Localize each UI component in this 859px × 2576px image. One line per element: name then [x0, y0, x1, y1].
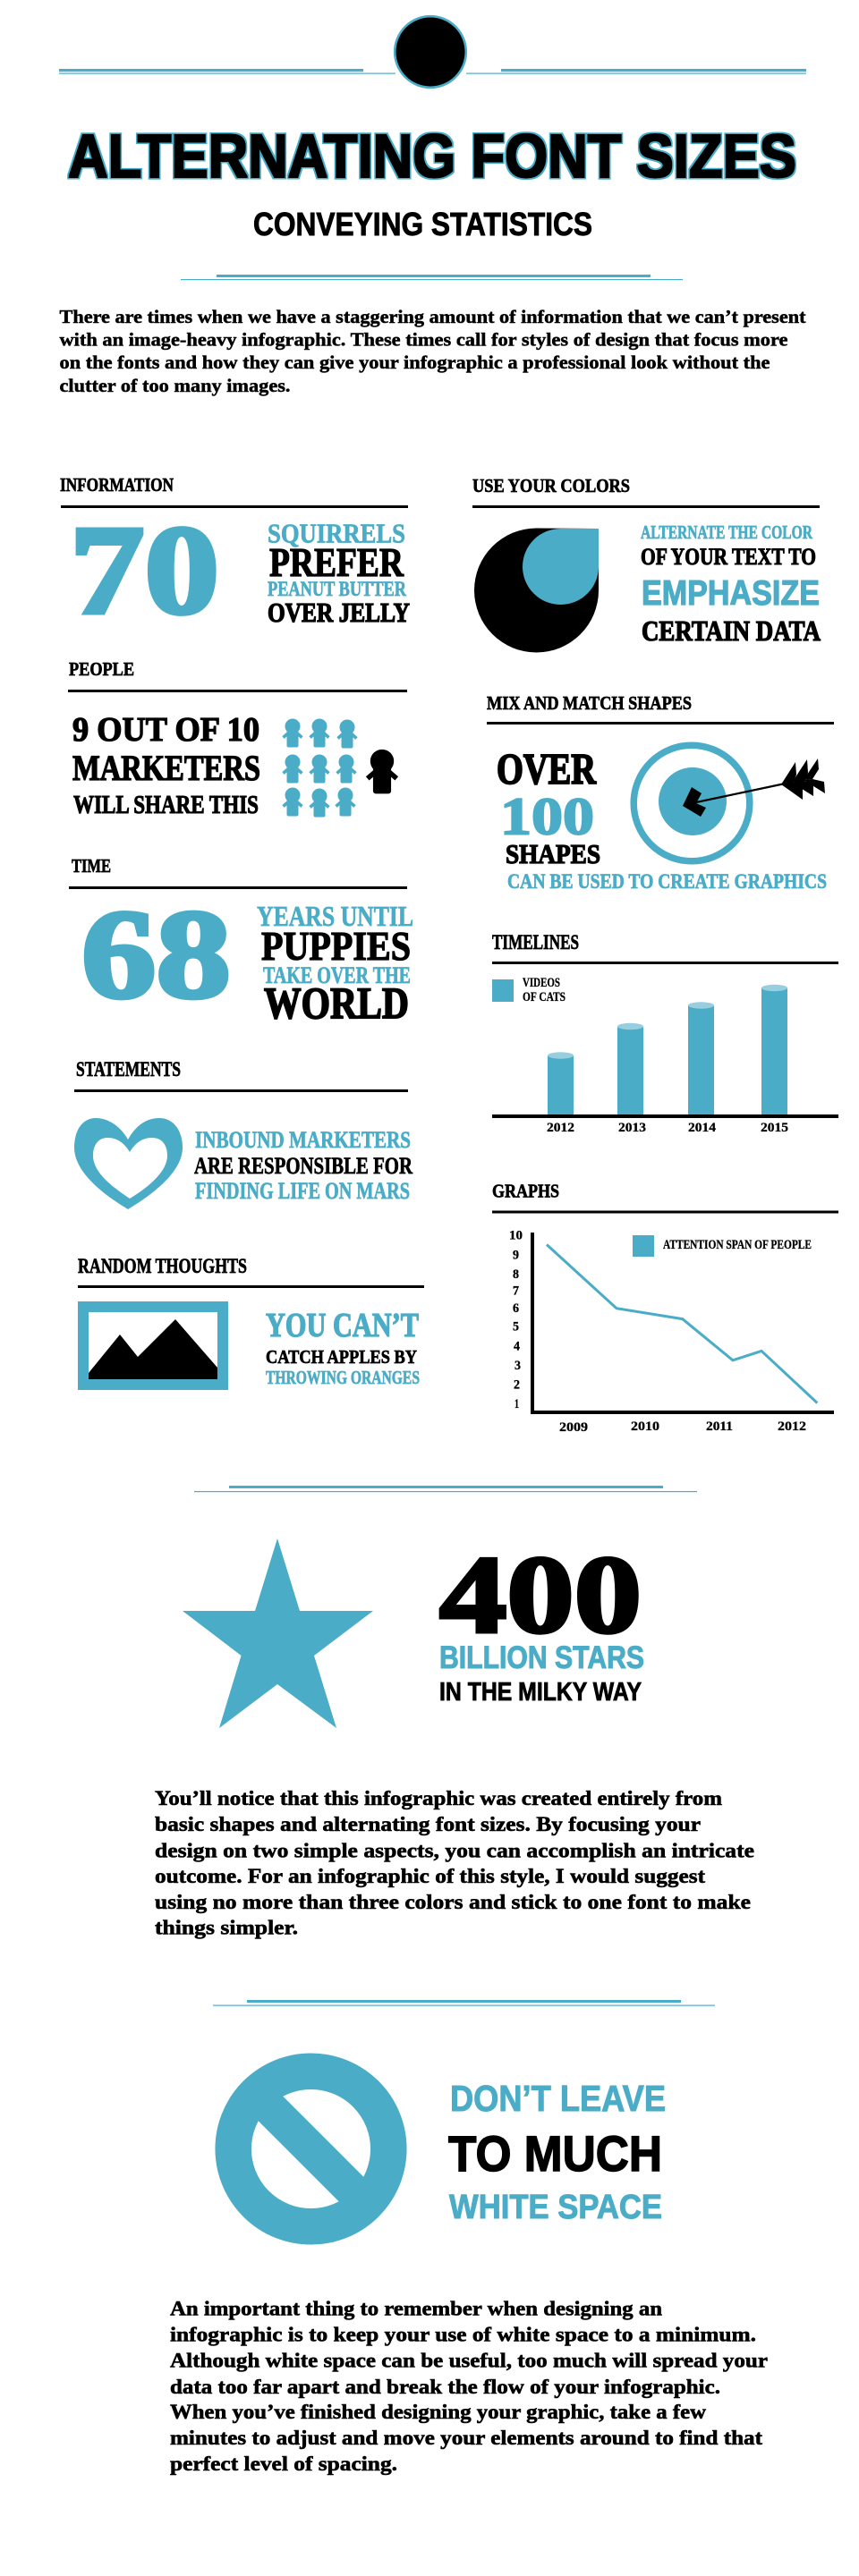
intro paragraph: on the fonts and how they can give your infographic a professional look without the	[59, 352, 770, 373]
apples statement: YOU CAN’T	[266, 1307, 419, 1344]
line chart: 7	[513, 1284, 519, 1299]
heading: mix and match shapes: MIX AND MATCH SHAPES	[487, 692, 692, 714]
squirrels statement	[268, 519, 410, 628]
squirrels statement: SQUIRRELS	[268, 519, 405, 549]
bar chart: 2014	[688, 1121, 716, 1135]
big number 70: 70	[70, 499, 219, 640]
apples statement: CATCH APPLES BY	[266, 1346, 417, 1368]
shapes statement	[497, 744, 827, 894]
icon: heart	[74, 1118, 183, 1209]
body paragraph: basic shapes: things simpler.	[155, 1917, 298, 1939]
squirrels statement: PEANUT BUTTER	[268, 578, 407, 601]
line chart	[509, 1229, 834, 1435]
apples statement	[266, 1307, 420, 1388]
body paragraph: white space: An important thing to remember when designing an	[170, 2297, 662, 2320]
panel: random thoughts	[78, 1255, 424, 1388]
squirrels statement: OVER JELLY	[268, 597, 410, 628]
icon: star	[183, 1538, 373, 1728]
stars statement: IN THE MILKY WAY	[439, 1678, 642, 1707]
line chart: 2011	[706, 1419, 733, 1434]
line chart: 8	[513, 1267, 519, 1282]
line chart: 6	[513, 1301, 519, 1316]
icon: black person	[368, 750, 396, 793]
white space statement	[448, 2078, 666, 2226]
divider	[181, 275, 683, 280]
panel: statements	[74, 1058, 412, 1209]
line chart: 3	[515, 1359, 521, 1373]
body paragraph: white space: data too far apart and break the flow of your infographic.	[170, 2376, 720, 2398]
heading: information: INFORMATION	[60, 474, 174, 496]
body paragraph: basic shapes: outcome. For an infographic of this style, I would suggest	[155, 1865, 705, 1887]
white space statement: TO MUCH	[448, 2125, 662, 2182]
bar chart: 2013	[618, 1121, 646, 1135]
line chart: 1	[515, 1397, 519, 1411]
big number 68: 68	[81, 884, 231, 1025]
puppies statement: PUPPIES	[261, 923, 411, 969]
body paragraph: basic shapes	[155, 1787, 754, 1939]
bar chart	[492, 985, 838, 1135]
divider	[213, 2000, 715, 2006]
line chart: 2	[514, 1378, 520, 1393]
intro paragraph: clutter of too many images.	[59, 375, 290, 396]
title: ALTERNATING FONT SIZES	[68, 122, 796, 191]
header ornament	[59, 16, 806, 88]
emphasize statement	[641, 523, 821, 647]
line chart: 9	[513, 1249, 519, 1263]
icon: prohibition sign	[234, 2072, 388, 2226]
puppies statement: YEARS UNTIL	[257, 900, 413, 932]
icon: target	[634, 745, 750, 861]
bar chart: 2015	[761, 1121, 788, 1135]
bar chart: 2012	[547, 1121, 574, 1135]
line chart: 2010	[631, 1419, 659, 1434]
marketers statement: MARKETERS	[72, 748, 260, 788]
icon: nested drops	[474, 528, 599, 653]
intro paragraph	[59, 306, 805, 396]
shapes statement: 100	[500, 787, 594, 846]
panel: graphs	[492, 1181, 838, 1435]
marketers statement: WILL SHARE THIS	[73, 792, 259, 819]
heading: time: TIME	[72, 855, 111, 877]
legend: attention span	[633, 1235, 812, 1257]
heading: statements: STATEMENTS	[76, 1058, 181, 1080]
body paragraph: white space: perfect level of spacing.	[170, 2453, 397, 2475]
heading: timelines: TIMELINES	[492, 931, 579, 953]
line chart: 4	[514, 1340, 520, 1354]
body paragraph: basic shapes: using no more than three colors and stick to one font to make	[155, 1891, 751, 1913]
body paragraph: white space: Although white space can be useful, too much will spread your	[170, 2349, 768, 2372]
inbound marketers statement: ARE RESPONSIBLE FOR	[194, 1153, 412, 1179]
body paragraph: white space: minutes to adjust and move your elements around to find that	[170, 2427, 762, 2449]
icon: picture frame with mountains	[83, 1307, 223, 1385]
legend: attention span: ATTENTION SPAN OF PEOPLE	[663, 1238, 812, 1252]
marketers statement: 9 OUT OF 10	[72, 711, 259, 749]
body paragraph: white space: infographic is to keep your use of white space to a minimum.	[170, 2324, 756, 2346]
stars statement	[439, 1533, 644, 1707]
stars statement: BILLION STARS	[439, 1640, 644, 1675]
subtitle: CONVEYING STATISTICS	[253, 206, 592, 242]
puppies statement: WORLD	[264, 978, 409, 1028]
line chart: 5	[513, 1320, 519, 1335]
legend: videos of cats: VIDEOS	[523, 976, 560, 990]
emphasize statement: CERTAIN DATA	[642, 614, 821, 647]
body paragraph: white space: When you’ve finished designing your graphic, take a few	[170, 2401, 706, 2423]
panel: information	[60, 474, 410, 640]
white space statement: DON’T LEAVE	[450, 2078, 666, 2119]
body paragraph: white space	[170, 2297, 768, 2475]
line chart: 2009	[559, 1420, 588, 1435]
body paragraph: basic shapes: You’ll notice that this infographic was created entirely from	[155, 1787, 722, 1809]
inbound marketers statement: FINDING LIFE ON MARS	[195, 1177, 410, 1204]
panel: people	[68, 658, 407, 819]
emphasize statement: EMPHASIZE	[642, 574, 820, 613]
stars statement: 400	[439, 1533, 642, 1657]
body paragraph: basic shapes: basic shapes and alternating font sizes. By focusing your	[155, 1813, 701, 1835]
emphasize statement: OF YOUR TEXT TO	[641, 544, 816, 570]
icon: nine teal people	[283, 719, 356, 817]
shapes statement: OVER	[497, 744, 596, 793]
inbound marketers statement: INBOUND MARKETERS	[195, 1126, 411, 1153]
intro paragraph: with an image-heavy infographic. These times call for styles of design that focus more	[59, 329, 787, 351]
panel: time	[69, 855, 413, 1028]
panel: mix and match shapes	[487, 692, 834, 894]
puppies statement	[257, 900, 413, 1028]
panel: timelines	[492, 931, 838, 1135]
panel: use your colors	[472, 475, 821, 653]
heading: random thoughts: RANDOM THOUGHTS	[78, 1255, 247, 1277]
heading: graphs: GRAPHS	[492, 1181, 559, 1202]
inbound marketers statement	[194, 1126, 412, 1204]
apples statement: THROWING ORANGES	[266, 1367, 420, 1388]
legend: videos of cats: OF CATS	[523, 990, 566, 1004]
divider	[194, 1486, 697, 1492]
shapes statement: SHAPES	[506, 839, 600, 869]
intro paragraph: There are times when we have a staggering amount of information that we can’t present	[59, 306, 805, 327]
white space statement: WHITE SPACE	[449, 2189, 662, 2226]
icon: arrow	[683, 758, 825, 817]
marketers statement	[72, 711, 260, 819]
legend: videos of cats	[492, 976, 566, 1004]
line chart: 10	[509, 1229, 523, 1243]
puppies statement: TAKE OVER THE	[263, 962, 411, 988]
heading: use your colors: USE YOUR COLORS	[472, 475, 630, 496]
heading: people: PEOPLE	[69, 658, 134, 680]
squirrels statement: PREFER	[269, 539, 404, 585]
line chart: 2012	[778, 1419, 806, 1434]
body paragraph: basic shapes: design on two simple aspects, you can accomplish an intricate	[155, 1840, 754, 1862]
